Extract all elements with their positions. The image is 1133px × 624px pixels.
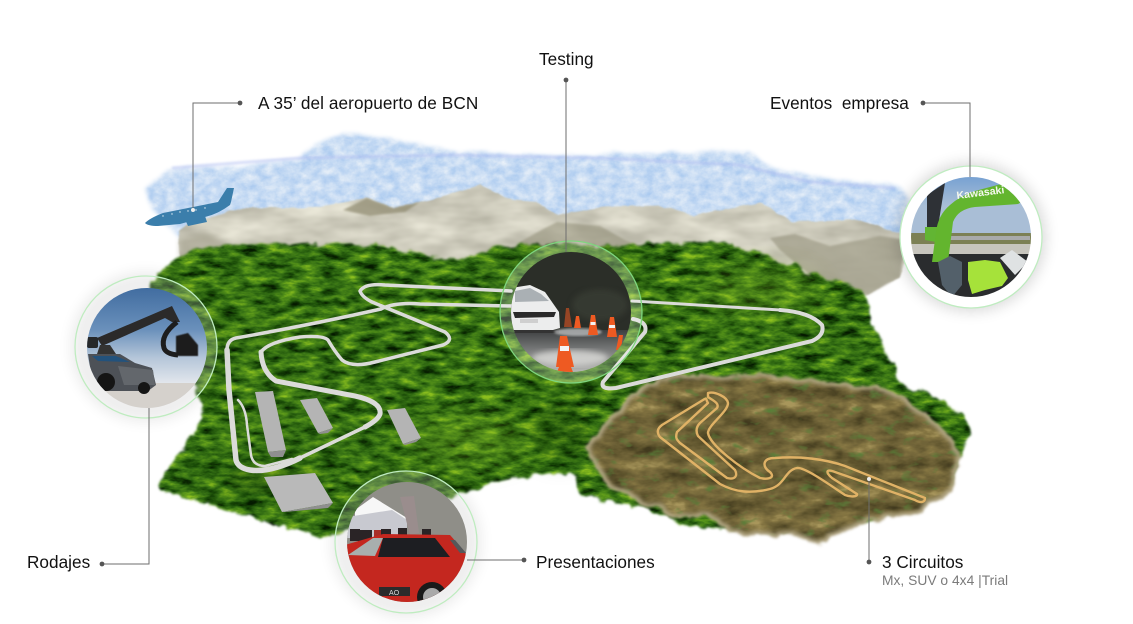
buildings	[255, 391, 421, 512]
callout: 3 circuitos: 3 Circuitos	[882, 552, 963, 572]
photo: wet braking test	[509, 250, 633, 374]
callout: eventos empresa: Eventos empresa	[770, 93, 909, 113]
land: grass	[146, 241, 972, 537]
callout: rodajes: Rodajes	[27, 552, 90, 572]
callout: testing: Testing	[539, 49, 594, 69]
callout: eventos empresa	[770, 93, 970, 177]
callout: airport	[191, 93, 478, 212]
photo: Kawasaki event: Kawasaki	[956, 184, 1005, 202]
asphalt circuit	[227, 285, 823, 470]
callout: 3 circuitos: Mx, SUV o 4x4 |Trial	[882, 573, 1008, 588]
callout: airport: A 35’ del aeropuerto de BCN	[258, 93, 478, 113]
land: dirt area	[582, 374, 964, 546]
photo: red car at event: AO	[389, 590, 400, 597]
callout: presentaciones	[467, 552, 655, 572]
callout: rodajes	[27, 408, 149, 572]
photo ring: testing	[500, 241, 642, 383]
photo: red car at event	[347, 482, 467, 602]
callout: presentaciones: Presentaciones	[536, 552, 655, 572]
photo: car with camera crane	[85, 286, 209, 410]
callout: testing	[539, 49, 594, 252]
photo: Kawasaki event	[909, 175, 1033, 302]
icon: airplane	[145, 188, 234, 226]
mountains	[178, 185, 910, 295]
photo ring: rodajes	[71, 272, 221, 422]
callout: 3 circuitos	[867, 477, 1008, 588]
photo ring: presentaciones	[331, 467, 481, 617]
motocross track	[658, 393, 925, 502]
photo ring: eventos empresa	[896, 162, 1046, 312]
sky watercolor	[145, 133, 925, 250]
